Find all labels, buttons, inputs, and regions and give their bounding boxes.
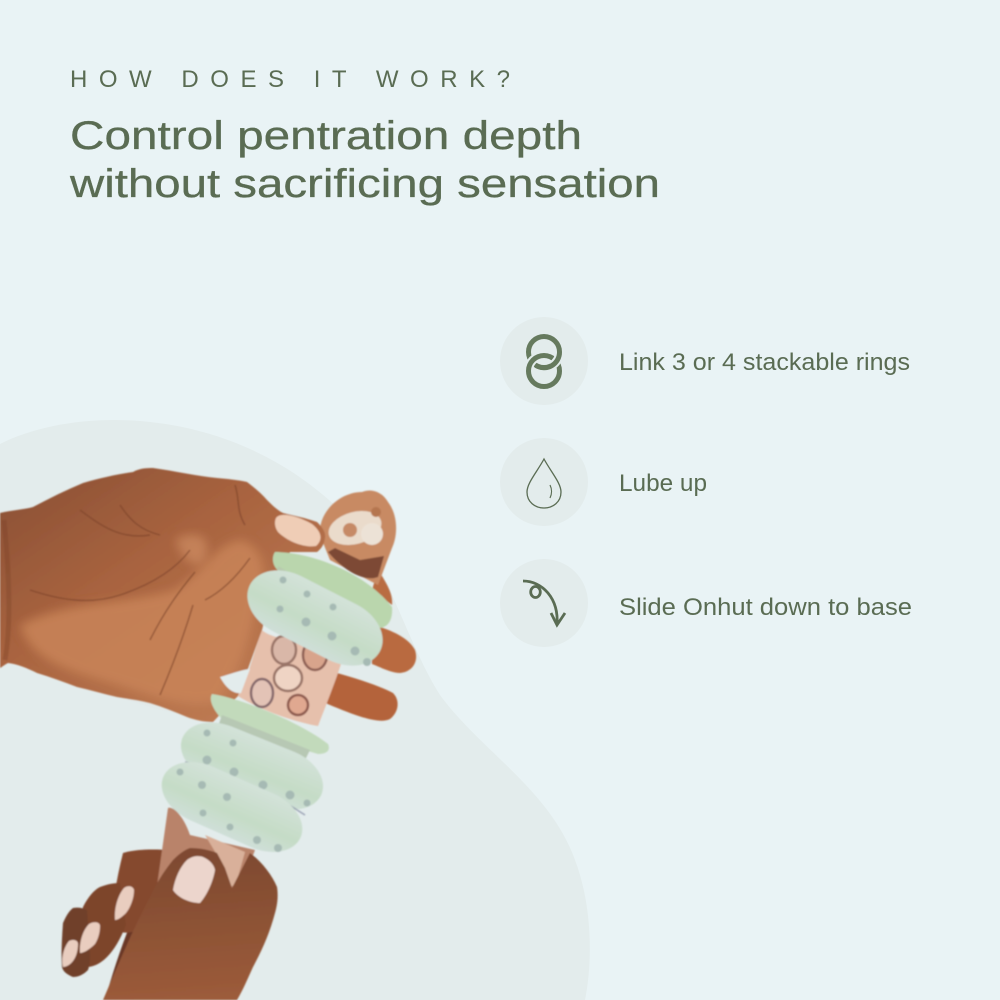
upper hand fingers behind product [323, 570, 416, 721]
label: Lube up [619, 470, 707, 497]
lower hand [62, 808, 278, 1000]
main heading [69, 114, 660, 206]
icon: curly down arrow [500, 559, 588, 647]
hand creases [4, 485, 250, 695]
photo: hands holding product [0, 468, 416, 1000]
label: Slide Onhut down to base [619, 594, 912, 621]
step 1: link rings [500, 317, 910, 405]
ring seam shadow [185, 762, 305, 815]
main heading: without sacrificing sensation [69, 162, 660, 206]
finger nails [62, 886, 134, 967]
gap between palm and shaft [220, 669, 250, 693]
glass below ring [155, 808, 255, 915]
finger A [112, 849, 171, 933]
eyebrow heading: HOW DOES IT WORK? [70, 66, 510, 93]
thumb nail [173, 856, 215, 903]
lower rings [152, 694, 332, 864]
product shaft [238, 490, 396, 726]
thumb nail upper [275, 515, 321, 546]
hidden palm between fingers [105, 925, 150, 1000]
finger fold highlight [175, 535, 207, 565]
main heading: Control pentration depth [70, 114, 582, 158]
upper hand [0, 468, 325, 722]
finger B [78, 883, 126, 967]
step 2: lube [500, 438, 707, 526]
label: Link 3 or 4 stackable rings [619, 349, 910, 376]
step 3: slide [500, 559, 912, 647]
background blob [0, 420, 590, 1000]
icon: linked rings [500, 317, 588, 405]
icon: water drop [500, 438, 588, 526]
thumb and palm [103, 848, 278, 1000]
palm highlight [20, 540, 264, 704]
finger C [62, 908, 90, 977]
upper rings [236, 552, 394, 679]
